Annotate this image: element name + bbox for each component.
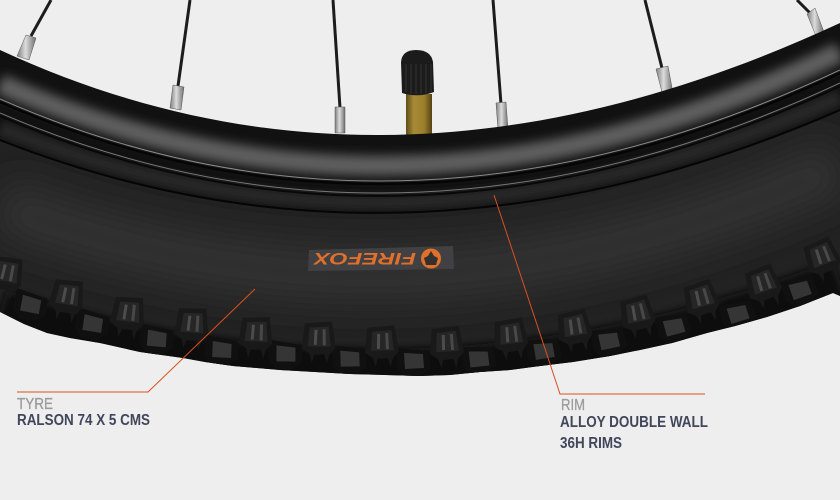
valve cap (401, 50, 434, 95)
sidewall sheen (0, 165, 840, 274)
valve (401, 50, 434, 138)
rim grooves (0, 70, 840, 196)
rim specification (560, 414, 708, 452)
leader line: rim (494, 195, 705, 394)
rim heading: RIM (561, 397, 585, 414)
brand name: FIREFOX (312, 249, 416, 268)
rim body (0, 23, 840, 212)
rim lower band (0, 97, 840, 202)
brand label: Firefox (308, 246, 454, 271)
tyre sidewall (0, 111, 840, 376)
rim specification: 36H RIMS (560, 435, 622, 452)
tyre specification: RALSON 74 X 5 CMS (17, 412, 150, 429)
leader line: tyre (17, 289, 255, 392)
callout: rim (560, 397, 708, 452)
spokes (17, 0, 824, 133)
tyre bead line (0, 110, 840, 213)
valve stem (406, 94, 432, 138)
tread lugs (0, 235, 840, 377)
spoke nipples (17, 8, 824, 133)
tyre (0, 111, 840, 376)
rim specification: ALLOY DOUBLE WALL (560, 414, 708, 431)
rim highlight (0, 52, 840, 166)
callout: tyre (17, 396, 150, 429)
brand emblem (421, 248, 441, 268)
dark tread band (0, 282, 840, 372)
rim (0, 23, 840, 203)
tyre heading: TYRE (17, 396, 53, 413)
